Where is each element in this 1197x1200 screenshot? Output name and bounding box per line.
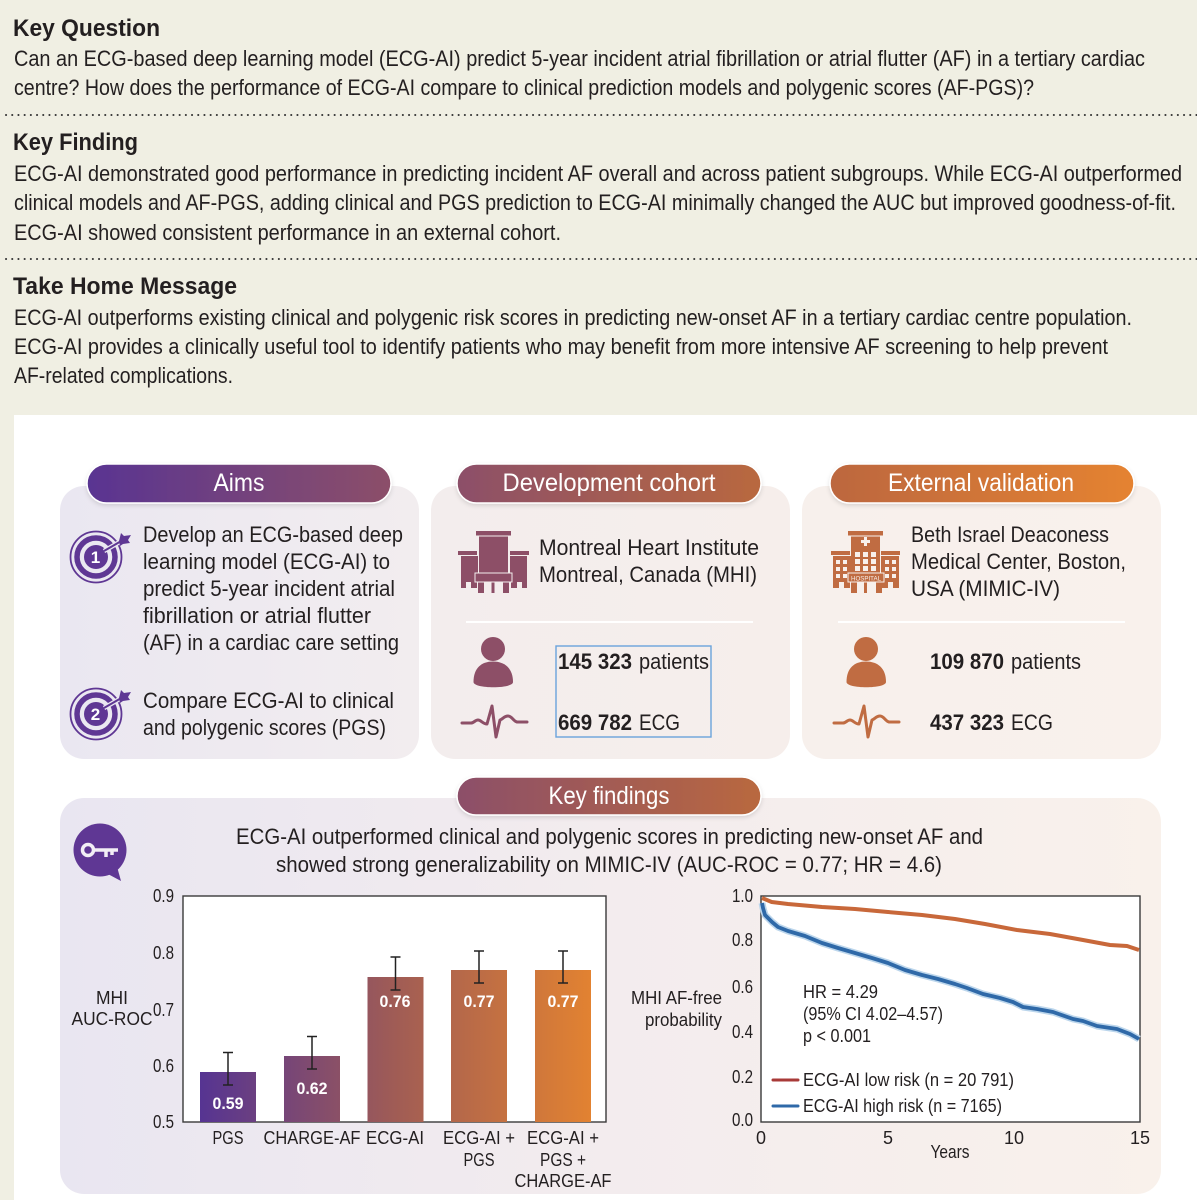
text: development site: Montreal Heart Institute [539, 535, 759, 560]
x axis title: Years [930, 1142, 970, 1162]
icon: person [846, 637, 886, 687]
stat: external ecgs [930, 710, 1053, 735]
pill: key findings [457, 777, 761, 815]
y axis ticks: 0.8 [732, 930, 753, 950]
icon: target 1 [70, 532, 131, 582]
stat: external patients: 109 870 [930, 649, 1004, 674]
bar values: 0.77 [548, 992, 578, 1011]
section: key finding [13, 129, 1182, 245]
text: external site: Medical Center, Boston, [911, 549, 1126, 574]
text: external site: USA (MIMIC-IV) [911, 576, 1060, 601]
section: take home message [13, 273, 1132, 388]
panel: development cohort [431, 464, 790, 759]
text: key finding body [14, 161, 1182, 245]
text: key question body [14, 46, 1145, 100]
text: key finding body: ECG-AI showed consistent performance in an external cohort. [14, 220, 561, 245]
text: aim 2: and polygenic scores (PGS) [143, 715, 386, 740]
y axis ticks: 0.5 [153, 1112, 174, 1132]
icon: ecg trace [834, 706, 899, 737]
pill: development cohort: Development cohort [502, 469, 716, 497]
y axis ticks: 0.4 [732, 1022, 753, 1042]
text: development site: Montreal, Canada (MHI) [539, 562, 757, 587]
x axis ticks: 10 [1004, 1128, 1024, 1148]
y axis title: MHI [96, 988, 128, 1008]
icon: target 2: 2 [91, 705, 100, 724]
x axis ticks: 15 [1130, 1128, 1150, 1148]
stat: development ecgs [558, 710, 680, 735]
text: key findings statement: showed strong generalizability on MIMIC-IV (AUC-ROC = 0.77; HR = 4.6) [276, 852, 942, 877]
bars [200, 970, 591, 1122]
survival chart [631, 886, 1150, 1162]
pill: aims [87, 464, 391, 503]
y axis ticks: 0.9 [153, 886, 174, 906]
bar chart [72, 886, 612, 1191]
text: aim 2 [143, 688, 394, 740]
text: aim 1: predict 5-year incident atrial [143, 576, 395, 601]
bar values: 0.59 [212, 1094, 244, 1113]
text: external site: Beth Israel Deaconess [911, 522, 1109, 547]
icon: target 2 [70, 688, 131, 740]
y axis ticks [153, 886, 174, 1132]
icon: target 1: 1 [91, 548, 100, 567]
error bars [223, 951, 568, 1085]
icon: hospital: HOSPITAL [851, 576, 882, 582]
bar values: 0.76 [380, 992, 410, 1011]
text: key findings statement: ECG-AI outperformed clinical and polygenic scores in predicting new-onset AF and [236, 824, 983, 849]
legend: ECG-AI low risk (n = 20 791) [803, 1070, 1014, 1090]
stat: development ecgs: 669 782 [558, 710, 632, 735]
text: take home body: ECG-AI provides a clinically useful tool to identify patients who may benefit from more intensive AF screening to help prevent [14, 334, 1108, 359]
text: key findings statement [236, 824, 983, 877]
y axis title: AUC-ROC [72, 1009, 152, 1029]
hazard ratio annotation: (95% CI 4.02–4.57) [803, 1004, 943, 1024]
heading: take home message: Take Home Message [13, 273, 237, 300]
x axis labels: PGS [212, 1128, 244, 1148]
y axis ticks: 0.6 [732, 977, 753, 997]
panel: aims [60, 464, 419, 759]
legend [773, 1070, 1014, 1116]
text: aim 1: Develop an ECG-based deep [143, 522, 403, 547]
icon: ecg trace [462, 706, 527, 737]
stat: development patients [558, 649, 709, 674]
bar values [212, 992, 578, 1113]
pill: aims: Aims [214, 469, 264, 497]
y axis ticks: 0.2 [732, 1067, 753, 1087]
y axis ticks: 0.0 [732, 1110, 753, 1130]
x axis labels: ECG-AI [366, 1128, 424, 1148]
x axis labels [212, 1128, 612, 1191]
hazard ratio annotation [803, 982, 943, 1046]
y axis ticks: 0.8 [153, 943, 174, 963]
pill: key findings: Key findings [548, 782, 670, 810]
y axis title: MHI AF-free [631, 988, 722, 1008]
y axis ticks: 0.7 [153, 1000, 174, 1020]
x axis labels: PGS [464, 1150, 494, 1170]
x axis labels: PGS + [540, 1150, 586, 1170]
x axis labels: CHARGE-AF [264, 1128, 360, 1148]
curve: high risk confidence band and line [762, 903, 1139, 1039]
hazard ratio annotation: HR = 4.29 [803, 982, 878, 1002]
panel: key findings [60, 777, 1161, 1194]
stat: development patients: 145 323 [558, 649, 632, 674]
section: key question [13, 15, 1145, 100]
panel: external validation [802, 464, 1161, 759]
y axis ticks [732, 886, 753, 1130]
text: aim 1 [143, 522, 403, 655]
curve: low risk [762, 898, 1139, 950]
y axis ticks: 1.0 [732, 886, 753, 906]
text: development site [539, 535, 759, 587]
stat: external patients: patients [1011, 649, 1081, 674]
icon: building [458, 531, 529, 593]
text: take home body: AF-related complications. [14, 363, 233, 388]
y axis title [631, 988, 722, 1030]
heading: key question: Key Question [13, 15, 160, 42]
text: take home body [14, 305, 1132, 388]
stat: development patients: patients [639, 649, 709, 674]
icon: person [474, 637, 513, 687]
text: aim 2: Compare ECG-AI to clinical [143, 688, 394, 713]
main white panel [14, 415, 1197, 1200]
legend: ECG-AI high risk (n = 7165) [803, 1096, 1002, 1116]
x axis ticks: 0 [756, 1128, 766, 1148]
x axis ticks [756, 1128, 1150, 1148]
text: key question body: centre? How does the performance of ECG-AI compare to clinical prediction models and polygenic scores (AF-PGS)? [14, 75, 1034, 100]
pill: external validation [830, 464, 1134, 503]
y axis title: probability [645, 1010, 722, 1030]
stat: external patients [930, 649, 1081, 674]
bar values: 0.77 [464, 992, 494, 1011]
heading: key finding: Key Finding [13, 129, 138, 156]
x axis labels: CHARGE-AF [514, 1171, 612, 1191]
selection box [556, 646, 711, 737]
stat: external ecgs: ECG [1011, 710, 1053, 735]
stat: external ecgs: 437 323 [930, 710, 1004, 735]
pill: external validation: External validation [888, 469, 1074, 497]
stat: development ecgs: ECG [639, 710, 680, 735]
pill: development cohort [457, 464, 761, 503]
icon: hospital [831, 531, 900, 593]
x axis labels: ECG-AI + [527, 1128, 599, 1148]
x axis ticks: 5 [883, 1128, 893, 1148]
text: aim 1: learning model (ECG-AI) to [143, 549, 390, 574]
x axis labels: ECG-AI + [443, 1128, 515, 1148]
text: external site [911, 522, 1126, 601]
hazard ratio annotation: p < 0.001 [803, 1026, 871, 1046]
icon: key in speech bubble [74, 824, 126, 881]
text: aim 1: fibrillation or atrial flutter [143, 603, 371, 628]
text: aim 1: (AF) in a cardiac care setting [143, 630, 399, 655]
y axis ticks: 0.6 [153, 1056, 174, 1076]
bar values: 0.62 [296, 1079, 328, 1098]
y axis title [72, 988, 152, 1029]
